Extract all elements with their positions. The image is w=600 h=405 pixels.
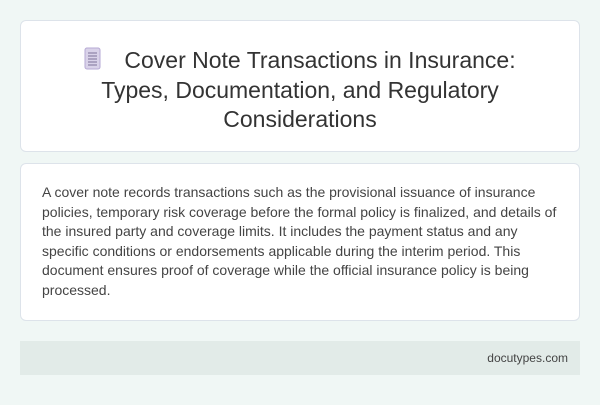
icon: document receipt <box>84 48 100 70</box>
text: source: docutypes.com <box>487 351 568 365</box>
title: Types, Documentation, and Regulatory <box>101 76 499 102</box>
panel: description card <box>20 163 580 321</box>
title: Considerations <box>223 106 377 132</box>
text block: description: A cover note records transactions such as the provisional issuance of insurance policies, temporary risk coverage before the formal policy is finalized, and details of the insured party and coverage limits. It includes the payment status and any specific conditions or endorsements applicable during the interim period. This document ensures proof of coverage while the official insurance policy is being processed. <box>42 184 556 298</box>
panel: title card <box>20 20 580 152</box>
title <box>84 47 516 132</box>
title: Cover Note Transactions in Insurance: <box>124 47 516 73</box>
footer band <box>20 341 580 375</box>
